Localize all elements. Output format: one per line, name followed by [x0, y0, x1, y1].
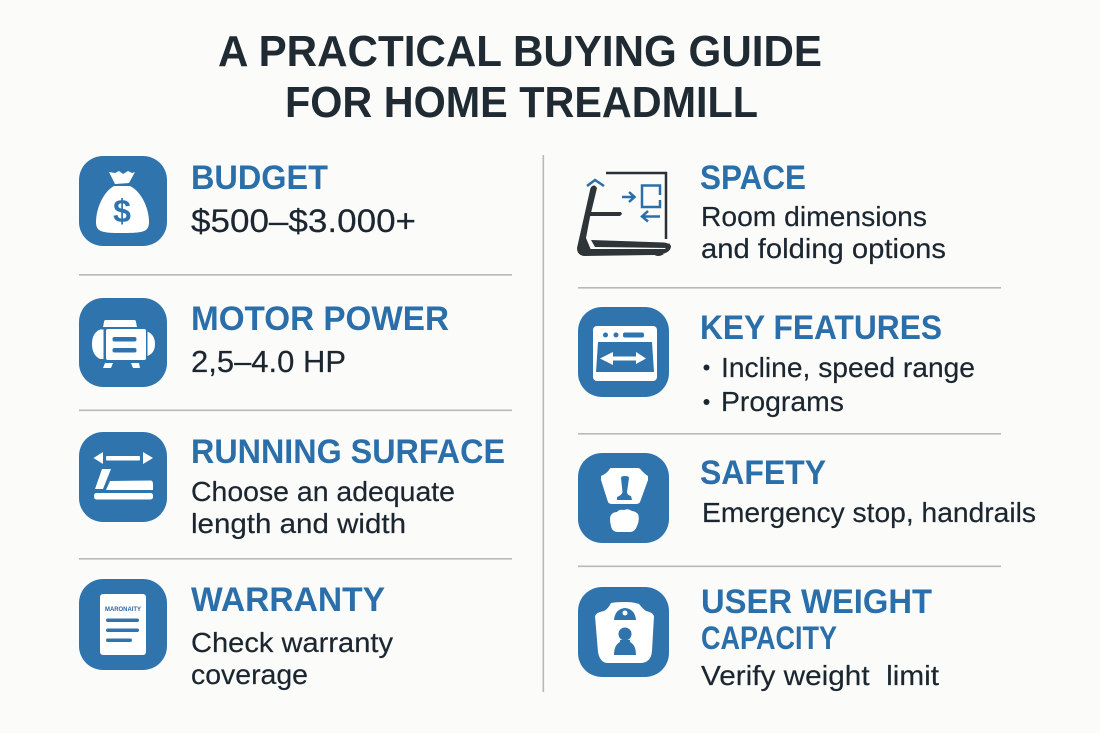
text: feature list: Programs: [721, 386, 844, 417]
panel: user weight capacity: [578, 583, 939, 691]
panel: warranty: [79, 579, 393, 690]
icon: weight scale with user: [578, 587, 669, 677]
text: space advice: Room dimensions: [701, 201, 927, 232]
title: FOR HOME TREADMILL: [285, 78, 758, 127]
title: [218, 27, 822, 127]
panel: safety: [578, 453, 1036, 543]
text: warranty advice: Check warranty: [191, 627, 393, 658]
text: warranty advice: coverage: [191, 659, 308, 690]
panel: budget: [79, 156, 416, 246]
icon: money bag: $: [113, 193, 131, 229]
text: running surface advice: [191, 476, 455, 539]
text: space advice: [701, 201, 946, 264]
text: space advice: and folding options: [701, 233, 946, 264]
icon: console display: [578, 307, 669, 397]
heading: user weight capacity: [701, 583, 932, 656]
heading: running surface: RUNNING SURFACE: [191, 433, 505, 471]
panel: motor power: [79, 298, 449, 387]
text: running surface advice: Choose an adequate: [191, 476, 455, 507]
panel: running surface: [79, 432, 505, 539]
icon: emergency stop: [578, 453, 669, 543]
heading: user weight capacity: USER WEIGHT: [701, 583, 932, 621]
text: feature list: [704, 352, 975, 417]
heading: warranty: WARRANTY: [191, 581, 385, 619]
heading: user weight capacity: CAPACITY: [701, 620, 837, 656]
heading: motor power: MOTOR POWER: [191, 300, 449, 338]
icon: warranty document: [79, 579, 167, 670]
text: feature list: Incline, speed range: [721, 352, 975, 383]
heading: key features: KEY FEATURES: [700, 309, 942, 347]
icon: motor: [79, 298, 167, 387]
title: A PRACTICAL BUYING GUIDE: [218, 27, 822, 76]
icon: money bag: [79, 156, 167, 246]
text: weight advice: Verify weight limit: [701, 660, 939, 691]
text: running surface advice: length and width: [191, 508, 406, 539]
text: budget range: $500–$3.000+: [191, 203, 416, 239]
icon: warranty document: MARONAITY: [105, 606, 142, 613]
heading: space: SPACE: [700, 159, 806, 197]
text: warranty advice: [191, 627, 393, 690]
icon: running deck: [79, 432, 167, 522]
heading: budget: BUDGET: [191, 159, 328, 197]
icon: treadmill in room: [577, 173, 671, 256]
heading: safety: SAFETY: [700, 454, 826, 492]
text: horsepower: 2,5–4.0 HP: [191, 344, 346, 379]
panel: space: [577, 159, 946, 264]
panel: key features: [578, 307, 975, 417]
text: safety advice: Emergency stop, handrails: [702, 497, 1036, 528]
